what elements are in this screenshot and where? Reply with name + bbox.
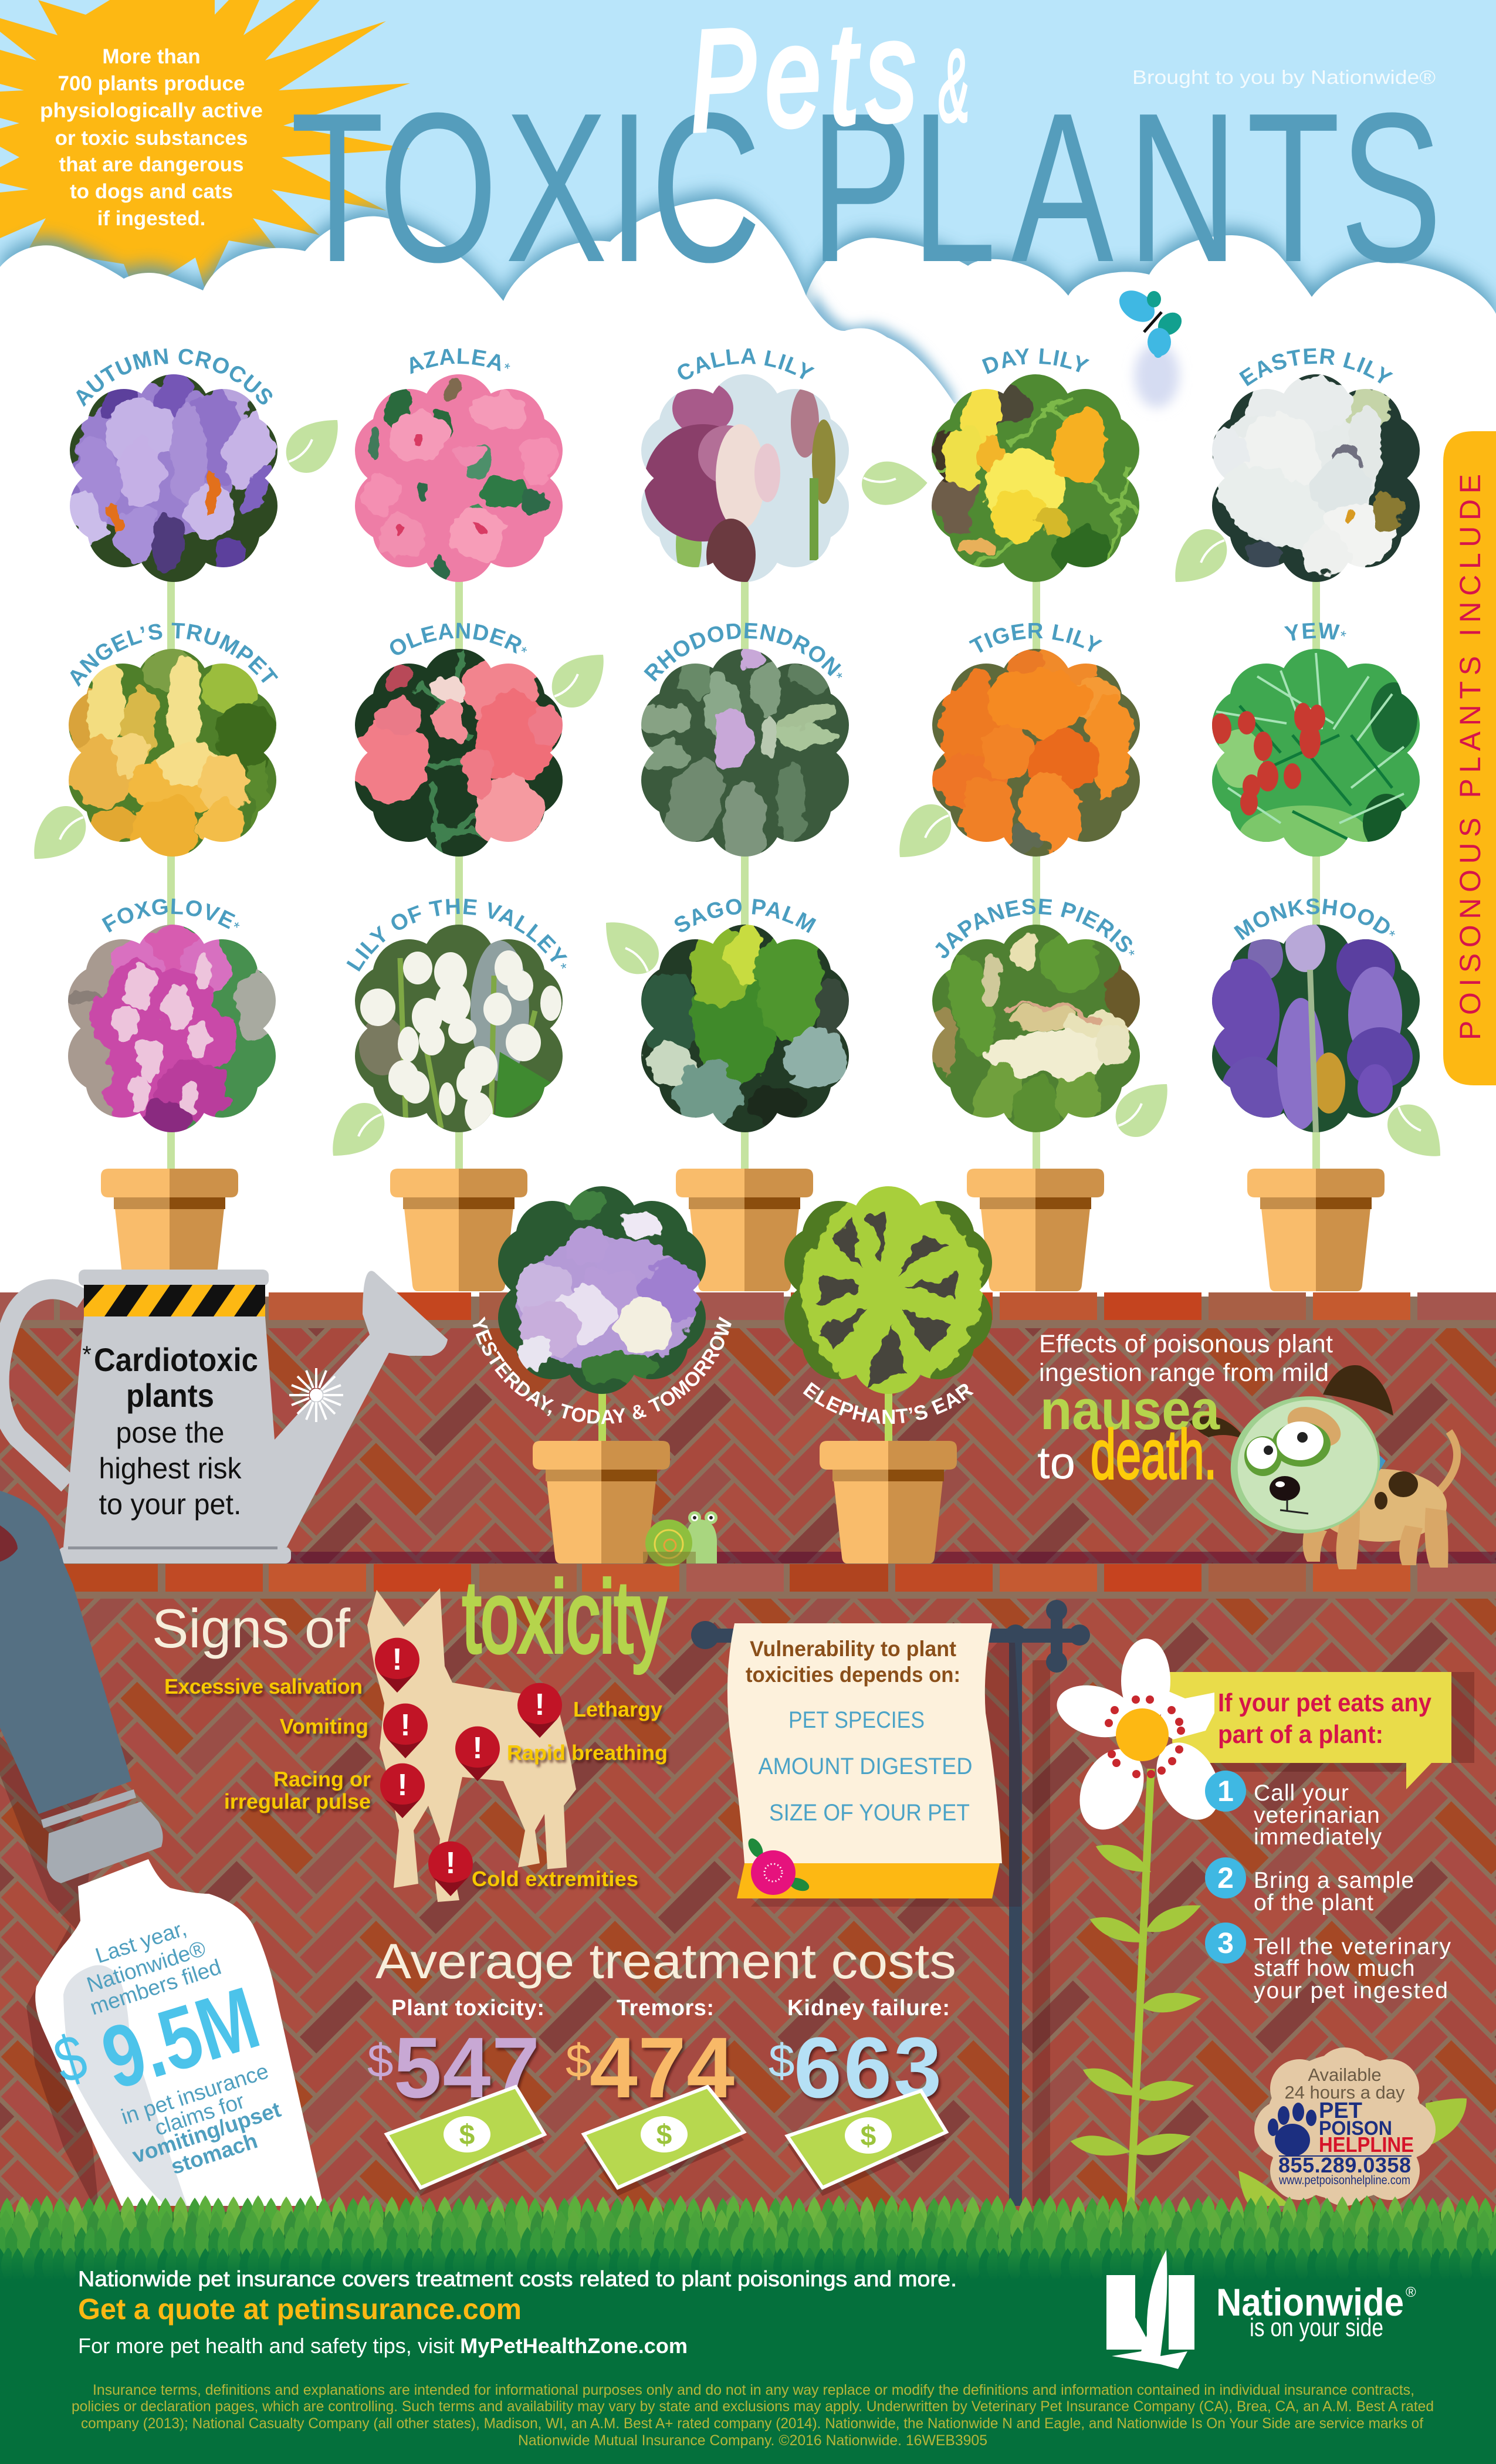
banner: vulnerability: Vulnerability to plant <box>750 1637 956 1661</box>
cost: plant toxicity: $ <box>459 2120 475 2151</box>
plant: yesterday, today and tomorrow: YESTERDAY, TODAY & TOMORROW <box>467 1315 737 1429</box>
clouds <box>0 191 1496 422</box>
steps list: of the plant <box>1254 1890 1374 1915</box>
illustration: big flower <box>1051 1639 1232 2206</box>
dog silhouette with symptom pins: ! <box>397 1768 408 1802</box>
text: nausea to death: ingestion range from mild <box>1039 1359 1329 1387</box>
icon: sparkle <box>289 1368 343 1422</box>
heading: signs of toxicity <box>152 1560 666 1674</box>
steps list: Bring a sample <box>1254 1868 1414 1893</box>
bottle: insurance claims: stomach <box>168 2128 260 2179</box>
plant: foxglove <box>49 905 295 1152</box>
footer calls to action: For more pet health and safety tips, visit MyPetHealthZone.com <box>78 2334 688 2358</box>
bottle: insurance claims: claims for <box>152 2089 248 2140</box>
text: nausea to death <box>1037 1330 1333 1494</box>
heading: signs of toxicity: Signs of <box>152 1597 351 1659</box>
plant labels: TIGER LILY <box>967 619 1105 660</box>
plant labels <box>63 344 1399 976</box>
watering can: highest risk <box>99 1452 242 1485</box>
plant labels: YEW* <box>1283 618 1348 647</box>
badge: pet poison helpline: 24 hours a day <box>1284 2082 1405 2103</box>
nationwide logo: Nationwide <box>1216 2280 1404 2324</box>
watering can: * <box>82 1342 92 1368</box>
dog silhouette with symptom pins: ! <box>534 1688 545 1722</box>
trowel handle <box>0 1491 163 1936</box>
sunburst with fact: if ingested. <box>97 207 205 230</box>
sign post <box>691 1600 1090 2206</box>
background: sky <box>0 0 1496 422</box>
plant labels: OLEANDER* <box>385 619 530 662</box>
cost: plant toxicity: Plant toxicity: <box>391 1996 544 2020</box>
steps list: Call your <box>1254 1781 1349 1806</box>
steps list: 3 <box>1217 1927 1234 1959</box>
fine print <box>72 2382 1434 2449</box>
banner: vulnerability: SIZE OF YOUR PET <box>769 1800 970 1826</box>
cost: kidney failure: $ <box>769 2035 794 2087</box>
plant labels: CALLA LILY <box>678 348 815 380</box>
steps list: 1 <box>1217 1775 1234 1808</box>
symptom labels <box>164 1674 668 1891</box>
dog silhouette with symptom pins <box>367 1588 576 1902</box>
plant labels: EASTER LILY <box>1236 344 1396 391</box>
symptom labels: Vomiting <box>280 1714 368 1738</box>
dog silhouette with symptom pins: ! <box>472 1731 483 1765</box>
watering can: plants <box>126 1377 214 1414</box>
bottle: insurance claims: vomiting/upset <box>130 2097 284 2168</box>
plant labels: SAGO PALM <box>670 895 820 939</box>
bottle: insurance claims: members filed <box>87 1955 224 2020</box>
symptom labels: Rapid breathing <box>507 1741 668 1765</box>
cost: tremors <box>566 1996 744 2196</box>
fine print: policies or declaration pages, which are controlling. Such terms and availability may vary by state and exclusions may apply. Underwritten by Veterinary Pet Insurance Company (CA), Brea, CA, an A.M. Best A rated <box>72 2398 1434 2415</box>
side tab: poisonous plants include: POISONOUS PLANTS INCLUDE <box>1454 474 1487 1040</box>
sunburst with fact: More than <box>102 45 201 68</box>
brought to you by: Brought to you by Nationwide® <box>1132 66 1436 88</box>
badge: pet poison helpline: www.petpoisonhelpline.com <box>1278 2174 1410 2187</box>
heading: signs of toxicity: toxicity <box>462 1560 666 1674</box>
symptom labels: irregular pulse <box>224 1789 371 1813</box>
side tab: poisonous plants include <box>1443 431 1496 1085</box>
dog silhouette with symptom pins: ! <box>445 1846 456 1880</box>
badge: pet poison helpline <box>1238 2047 1467 2206</box>
bottle: insurance claims: Nationwide® <box>84 1936 208 1997</box>
illustration: sick dog <box>1189 1365 1457 1569</box>
plant: calla lily <box>639 373 851 591</box>
plant labels: AZALEA* <box>410 348 510 374</box>
cost: kidney failure: 663 <box>794 2020 942 2116</box>
steps list: Tell the veterinary <box>1254 1934 1451 1959</box>
steps list: veterinarian <box>1254 1803 1380 1828</box>
bottle: insurance claims: Last year, <box>93 1916 189 1968</box>
plant: yesterday, today and tomorrow <box>467 1167 737 1563</box>
cost: plant toxicity: 547 <box>394 2020 540 2116</box>
text: nausea to death: to <box>1037 1437 1075 1488</box>
flower pots on top shelf <box>101 1169 1385 1291</box>
plant labels: ANGEL’S TRUMPET <box>63 619 282 691</box>
plant: day lily <box>932 374 1139 582</box>
footer calls to action: Get a quote at petinsurance.com <box>78 2293 522 2326</box>
footer band <box>0 2279 1496 2464</box>
speech bubble: if your pet eats: If your pet eats any <box>1218 1688 1431 1717</box>
plant: lily of the valley <box>353 923 564 1134</box>
heading: pets and: & <box>939 28 969 143</box>
steps list: your pet ingested <box>1254 1978 1448 2003</box>
cost: tremors: Tremors: <box>617 1996 714 2020</box>
plant: autumn crocus <box>70 374 277 582</box>
watering can: Cardiotoxic <box>94 1341 258 1378</box>
plant: elephant's ear <box>765 1167 1011 1563</box>
badge: pet poison helpline: POISON <box>1319 2117 1392 2140</box>
symptom labels: Excessive salivation <box>164 1674 363 1698</box>
cost: tremors: $ <box>566 2035 591 2087</box>
steps list: 2 <box>1217 1861 1234 1894</box>
plant: japanese pieris <box>913 905 1159 1152</box>
hedge <box>0 2195 1496 2284</box>
steps list <box>1205 1771 1451 2003</box>
badge: pet poison helpline: HELPLINE <box>1319 2133 1414 2157</box>
steps list: staff how much <box>1254 1956 1416 1981</box>
text: nausea to death: Effects of poisonous plant <box>1039 1330 1333 1358</box>
watering can: to your pet. <box>99 1488 242 1521</box>
cost: plant toxicity: $ <box>367 2035 393 2087</box>
symptom labels: Lethargy <box>573 1697 662 1721</box>
sunburst with fact: to dogs and cats <box>70 180 233 203</box>
nationwide logo: ® <box>1406 2284 1416 2300</box>
plant: easter lily <box>1212 374 1420 582</box>
stems <box>167 575 1320 1173</box>
speech bubble: if your pet eats: part of a plant: <box>1218 1720 1383 1749</box>
sunburst with fact <box>0 0 410 290</box>
plant: rhododendron <box>641 649 849 857</box>
cost: kidney failure: $ <box>861 2121 876 2152</box>
text: nausea to death: nausea <box>1040 1379 1220 1441</box>
heading: average treatment costs: Average treatment costs <box>375 1934 956 1989</box>
cost: tremors: 474 <box>590 2020 735 2116</box>
banner: vulnerability: PET SPECIES <box>788 1707 925 1733</box>
background: white page <box>0 404 1496 1301</box>
sunburst with fact: that are dangerous <box>59 153 244 176</box>
plant labels: JAPANESE PIERIS* <box>929 895 1139 963</box>
plant labels: MONKSHOOD* <box>1230 895 1399 945</box>
nationwide logo: is on your side <box>1250 2313 1383 2342</box>
plant: monkshood <box>1209 920 1421 1134</box>
bottle: insurance claims <box>26 1859 323 2218</box>
brick wall <box>0 1292 1496 2235</box>
watering can <box>0 1270 448 1563</box>
fine print: Insurance terms, definitions and explanations are intended for informational purposes only and do not in any way replace or modify the definitions and information contained in individual insurance contracts, <box>93 2382 1414 2398</box>
bottle: insurance claims: in pet insurance <box>119 2059 272 2129</box>
cost: plant toxicity <box>367 1996 544 2196</box>
plant: azalea <box>355 374 563 582</box>
decorative plant leaves <box>34 420 1440 1156</box>
plant: angel's trumpet <box>69 649 276 857</box>
plant labels: LILY OF THE VALLEY* <box>342 895 571 976</box>
symptom labels: Cold extremities <box>472 1867 638 1891</box>
badge: pet poison helpline: PET <box>1319 2099 1362 2123</box>
sunburst with fact: physiologically active <box>40 99 263 122</box>
fine print: Nationwide Mutual Insurance Company. ©2016 Nationwide. 16WEB3905 <box>518 2432 987 2449</box>
cost: kidney failure <box>769 1996 950 2196</box>
plant: sago palm <box>622 905 868 1152</box>
plant labels: AUTUMN CROCUS <box>76 348 272 407</box>
footer calls to action <box>78 2267 957 2358</box>
badge: pet poison helpline: Available <box>1308 2064 1382 2085</box>
fine print: company (2013); National Casualty Company (all other states), Madison, WI, an A.M. Best A+ rated company (2014). Nationwide, the Nationwide N and Eagle, and Nationwide Is On Your Side are service marks of <box>81 2415 1423 2432</box>
speech bubble: if your pet eats <box>1169 1672 1474 1789</box>
plant: yew <box>1210 647 1421 864</box>
dog silhouette with symptom pins: ! <box>392 1643 402 1677</box>
plant labels: RHODODENDRON* <box>639 619 847 686</box>
nationwide logo <box>1106 2250 1416 2369</box>
plant: tiger lily <box>913 629 1159 876</box>
cost: kidney failure: Kidney failure: <box>787 1996 950 2020</box>
bottle: insurance claims: $ <box>46 2020 94 2098</box>
plant labels: DAY LILY <box>982 348 1090 374</box>
icon: butterfly <box>1113 284 1186 408</box>
sunburst with fact: or toxic substances <box>55 127 248 150</box>
title: toxic plants: TOXIC PLANTS <box>290 69 1442 307</box>
plant: oleander <box>355 649 563 857</box>
banner: vulnerability: AMOUNT DIGESTED <box>758 1754 973 1779</box>
sunburst with fact: 700 plants produce <box>58 72 245 95</box>
icon: snail <box>643 1511 717 1566</box>
banner: vulnerability: toxicities depends on: <box>746 1663 960 1687</box>
steps list: immediately <box>1254 1825 1382 1850</box>
banner: vulnerability <box>727 1623 1021 1907</box>
bottle: insurance claims: 9.5M <box>91 1968 270 2108</box>
footer calls to action: Nationwide pet insurance covers treatment costs related to plant poisonings and more. <box>78 2267 957 2291</box>
cost: tremors: $ <box>656 2120 672 2151</box>
dog silhouette with symptom pins: ! <box>400 1708 411 1742</box>
text: nausea to death: death. <box>1091 1416 1217 1494</box>
plant labels: FOXGLOVE* <box>99 895 243 937</box>
plant: elephant's ear: ELEPHANT’S EAR <box>799 1378 977 1429</box>
symptom labels: Racing or <box>273 1767 371 1791</box>
badge: pet poison helpline: 855.289.0358 <box>1278 2153 1411 2177</box>
watering can: pose the <box>116 1416 224 1449</box>
